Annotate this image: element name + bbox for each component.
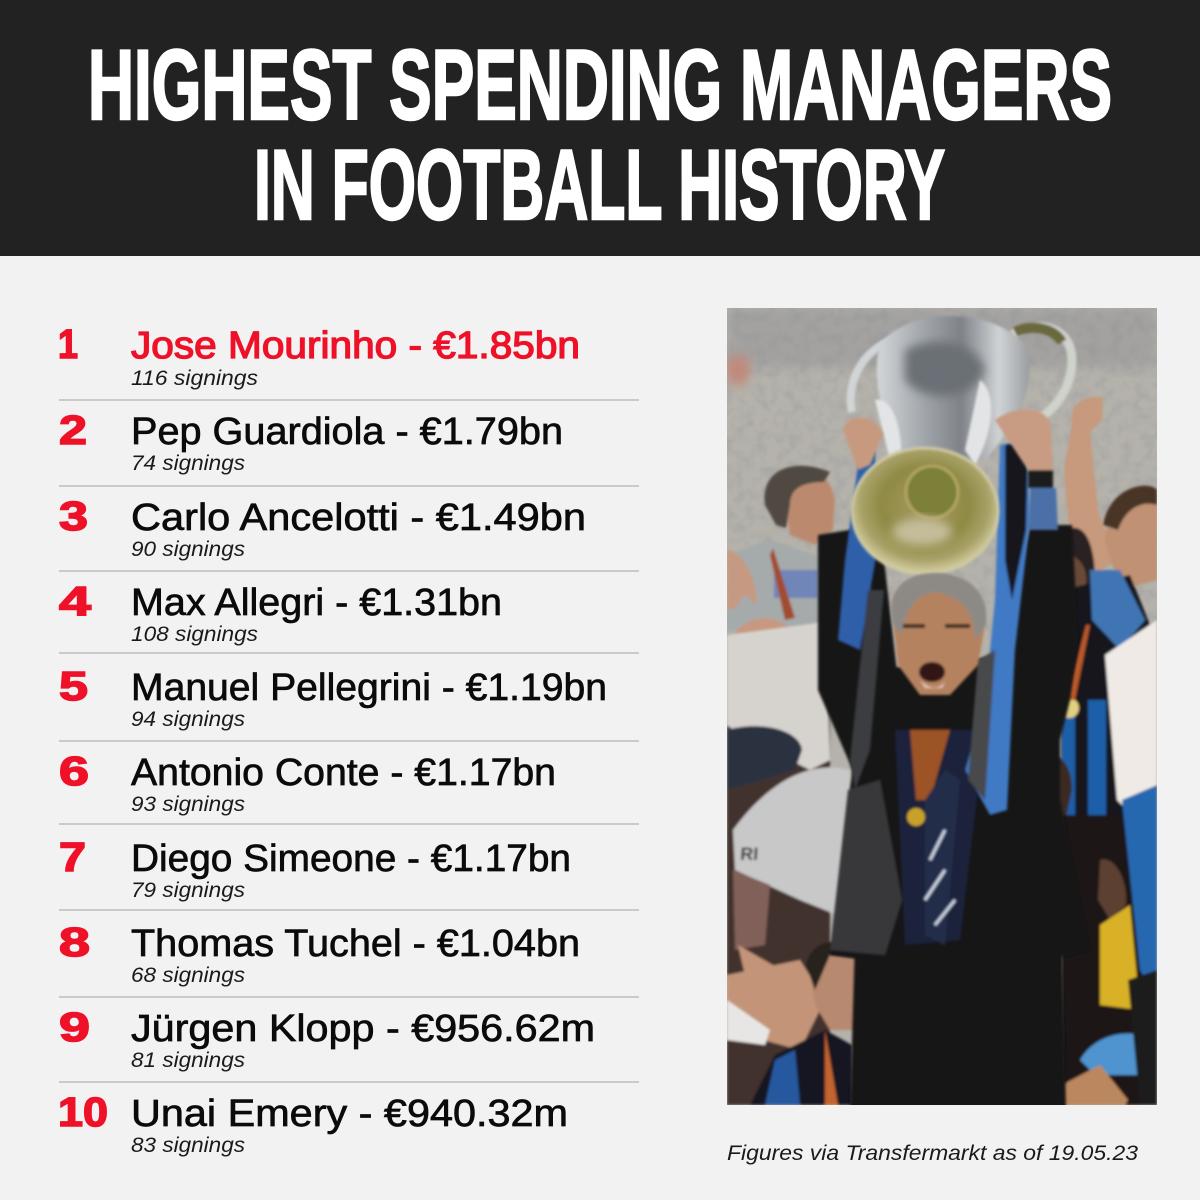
inter ribbons (838, 440, 1030, 815)
ranking list (58, 321, 639, 1157)
row 5: Manuel Pellegrini: 5 (59, 663, 88, 709)
manager head (891, 573, 986, 695)
row 9: Jurgen Klopp: 9 (59, 1004, 90, 1050)
row 8: Thomas Tuchel (59, 919, 580, 987)
left side people: RI (740, 844, 759, 864)
photo caption: Figures via Transfermarkt as of 19.05.23 (727, 1141, 1138, 1165)
left side people (727, 466, 866, 1105)
row 2: Pep Guardiola: 74 signings (131, 451, 245, 475)
row 7: Diego Simeone: 7 (59, 834, 86, 880)
row 5: Manuel Pellegrini: Manuel Pellegrini - €1.19bn (131, 667, 607, 709)
row 5: Manuel Pellegrini (59, 663, 607, 731)
row 4: Max Allegri: Max Allegri - €1.31bn (131, 582, 502, 624)
row 2: Pep Guardiola: 2 (59, 407, 87, 453)
row 3: Carlo Ancelotti: 90 signings (131, 537, 245, 561)
header band (0, 0, 1200, 256)
title (88, 29, 1112, 240)
row 8: Thomas Tuchel: 68 signings (131, 963, 245, 987)
row 3: Carlo Ancelotti: Carlo Ancelotti - €1.49bn (131, 497, 586, 539)
row 10: Unai Emery: Unai Emery - €940.32m (131, 1093, 568, 1135)
row 4: Max Allegri (59, 578, 502, 646)
crowd background (726, 308, 1157, 638)
row 3: Carlo Ancelotti: 3 (59, 493, 88, 539)
row 7: Diego Simeone (59, 834, 571, 902)
row 4: Max Allegri: 108 signings (131, 622, 258, 646)
row 2: Pep Guardiola (59, 407, 563, 475)
photo: manager lifting trophy (726, 308, 1157, 1110)
row 6: Antonio Conte: 93 signings (131, 792, 245, 816)
row 3: Carlo Ancelotti (59, 493, 586, 561)
row 9: Jurgen Klopp: 81 signings (131, 1048, 245, 1072)
row 1: Jose Mourinho: 116 signings (131, 366, 258, 390)
row 8: Thomas Tuchel: Thomas Tuchel - €1.04bn (131, 923, 580, 965)
hands and wrists (843, 409, 1058, 530)
row 10: Unai Emery: 10 (58, 1089, 108, 1135)
row 5: Manuel Pellegrini: 94 signings (131, 707, 245, 731)
row 1: Jose Mourinho (58, 321, 580, 390)
row 6: Antonio Conte (59, 748, 556, 816)
trophy handles (851, 327, 1072, 418)
row 8: Thomas Tuchel: 8 (59, 919, 90, 965)
row 4: Max Allegri: 4 (59, 578, 91, 624)
trophy cup (877, 316, 1029, 460)
row 9: Jurgen Klopp: Jürgen Klopp - €956.62m (131, 1008, 595, 1050)
row 6: Antonio Conte: 6 (59, 748, 89, 794)
right side people (1058, 396, 1157, 1105)
row 2: Pep Guardiola: Pep Guardiola - €1.79bn (131, 411, 563, 453)
row 7: Diego Simeone: 79 signings (131, 878, 245, 902)
row 7: Diego Simeone: Diego Simeone - €1.17bn (131, 838, 571, 880)
row 1: Jose Mourinho: Jose Mourinho - €1.85bn (131, 325, 580, 367)
trophy base disc (852, 448, 998, 574)
row 10: Unai Emery (58, 1089, 568, 1157)
row 10: Unai Emery: 83 signings (131, 1133, 245, 1157)
row 1: Jose Mourinho: 1 (58, 321, 78, 367)
row 6: Antonio Conte: Antonio Conte - €1.17bn (131, 752, 556, 794)
row 9: Jurgen Klopp (59, 1004, 595, 1072)
manager suit arms and body (818, 525, 1090, 1110)
